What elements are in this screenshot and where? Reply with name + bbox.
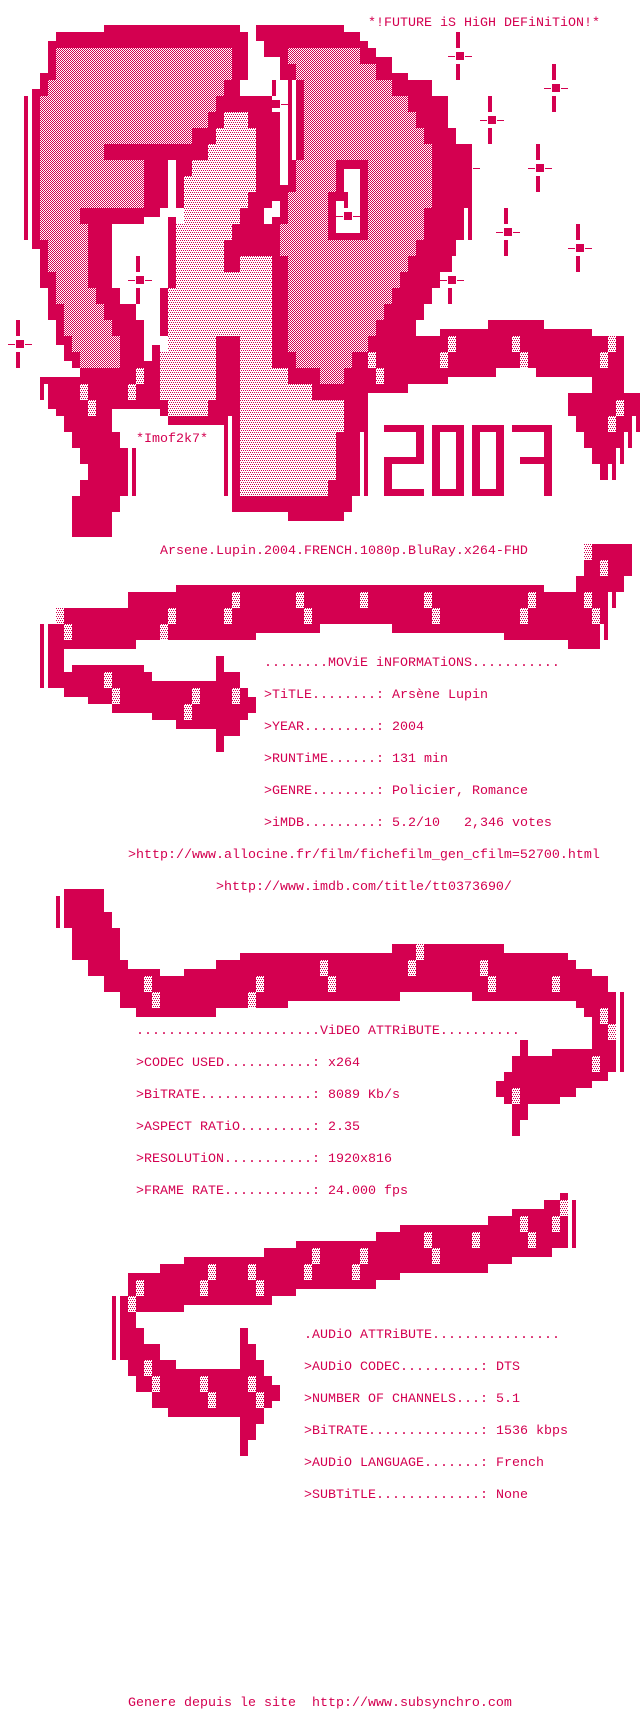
star [568,224,592,272]
language: >AUDiO LANGUAGE.......: French [304,1456,544,1471]
genre: >GENRE........: Policier, Romance [264,784,528,799]
allocine link: >http://www.allocine.fr/film/fichefilm_gen_cfilm=52700.html [128,848,600,863]
aspect ratio: >ASPECT RATiO.........: 2.35 [136,1120,360,1135]
release name: Arsene.Lupin.2004.FRENCH.1080p.BluRay.x264-FHD [160,544,528,559]
video heading: .......................ViDEO ATTRiBUTE.......... [136,1024,520,1039]
ribbon 2 [56,889,624,1136]
imdb rating: >iMDB.........: 5.2/10 2,346 votes [264,816,552,831]
medium dither fill [40,48,432,384]
star in head box [336,212,360,220]
ribbon 1 [40,544,632,752]
star [128,256,152,304]
light dither fill [160,112,344,496]
star [8,320,32,368]
title: >TiTLE........: Arsène Lupin [264,688,488,703]
audio bitrate: >BiTRATE..............: 1536 kbps [304,1424,568,1439]
star [528,144,552,192]
movie heading: ........MOViE iNFORMATiONS........... [264,656,560,671]
ribbon 3 specks [128,1200,568,1408]
footer: Genere depuis le site http://www.subsynchro.com [128,1696,512,1711]
runtime: >RUNTiME......: 131 min [264,752,448,767]
panel: movie informations [264,656,560,831]
ribbon 3 [112,1193,576,1456]
audio codec: >AUDiO CODEC..........: DTS [304,1360,520,1375]
imdb link: >http://www.imdb.com/title/tt0373690/ [216,880,512,895]
panel: audio attributes [304,1328,568,1503]
video bitrate: >BiTRATE..............: 8089 Kb/s [136,1088,400,1103]
head outline and ribbon body [24,25,640,537]
frame rate: >FRAME RATE...........: 24.000 fps [136,1184,408,1199]
credit: *Imof2k7* [136,432,208,447]
ribbon 2 specks [144,944,616,1104]
subtitle: >SUBTiTLE.............: None [304,1488,528,1503]
resolution: >RESOLUTiON...........: 1920x816 [136,1152,392,1167]
channels: >NUMBER OF CHANNELS...: 5.1 [304,1392,520,1407]
slogan: *!FUTURE iS HiGH DEFiNiTiON!* [368,16,600,31]
year 2007 block digits [384,425,552,496]
codec: >CODEC USED...........: x264 [136,1056,360,1071]
year: >YEAR.........: 2004 [264,720,424,735]
ribbon 1 specks [56,544,608,720]
audio heading: .AUDiO ATTRiBUTE................ [304,1328,560,1343]
ascii logo: head with ribbon [24,25,640,537]
ribbon shade specks [80,336,624,432]
star [448,32,472,80]
star [480,96,504,144]
star [272,80,288,108]
panel: video attributes [136,1024,520,1199]
star [496,208,520,256]
star [440,256,464,304]
star [544,64,568,112]
